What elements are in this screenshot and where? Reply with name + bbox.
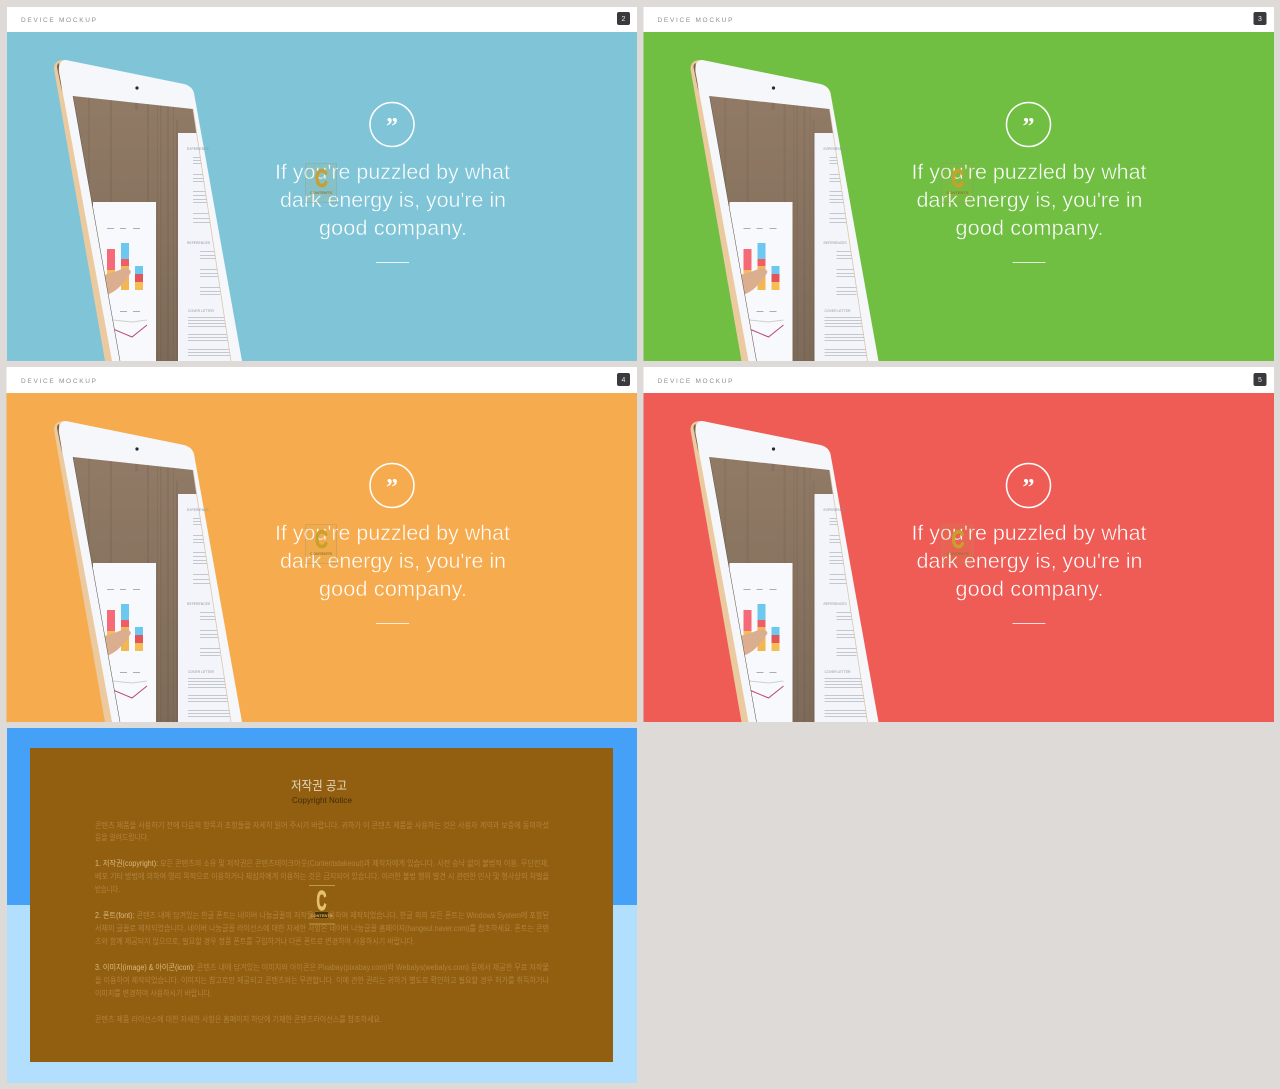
watermark logo: C: [315, 526, 328, 554]
short divider line: [376, 262, 409, 263]
watermark logo: [306, 164, 336, 202]
slide header bar: [7, 7, 637, 32]
watermark logo: [309, 885, 335, 924]
slide header label: DEVICE MOCKUP: [21, 17, 96, 24]
page number badge: [617, 373, 630, 386]
page number badge: 5: [1258, 377, 1262, 384]
tablet photo mockup: EXPERIENCE: [187, 508, 210, 512]
short divider line: [376, 623, 409, 624]
quote text: dark energy is, you're in: [916, 188, 1142, 212]
tablet photo mockup: REFERENCES: [187, 602, 211, 606]
watermark logo: [942, 524, 973, 564]
quote text: good company.: [956, 577, 1104, 601]
quote text: [275, 160, 510, 240]
tablet photo mockup: [690, 60, 886, 365]
slide header label: DEVICE MOCKUP: [21, 378, 96, 385]
notice body text: 이미지를 변경하여 사용하시기 바랍니다.: [95, 988, 212, 998]
notice body text: 서체의 글꼴로 제작되었습니다. 네이버 나눔글꼴 라이선스에 대한 자세한 사항은 네이버 나눔글꼴 홈페이지(hangeul.naver.com)를 참조하세요. 폰트는 콘텐: [95, 923, 549, 933]
slide colour background: [644, 393, 1274, 722]
quote text: If you're puzzled by what: [275, 160, 510, 184]
notice body text: 을 이용하여 제작되었습니다. 이미지는 참고로만 제공되고 콘텐츠와는 무관합니다. 이에 관한 권리는 귀하가 별도로 확인하고 필요할 경우 허가를 취득하거나: [95, 975, 550, 985]
panel: copyright notice slide: [7, 728, 637, 1083]
slide colour background: [7, 32, 637, 361]
panel: device mockup slide 2, blue: [7, 7, 637, 365]
watermark logo: CONTENTS: [946, 190, 969, 195]
tablet photo mockup: [54, 60, 250, 365]
icon: quotation mark in circle: [1006, 464, 1050, 508]
watermark logo: [942, 164, 973, 202]
page number badge: [1254, 373, 1266, 386]
quote text: If you're puzzled by what: [275, 521, 510, 545]
watermark logo: C: [952, 526, 964, 554]
quote text: good company.: [956, 216, 1104, 240]
quote text: dark energy is, you're in: [280, 549, 506, 573]
watermark logo: C: [952, 165, 964, 193]
watermark logo: CONTENTS: [310, 190, 332, 195]
notice body text: 음을 알려드립니다.: [95, 832, 149, 842]
tablet photo mockup: [690, 421, 886, 726]
notice body text: 콘텐츠 제품을 사용하기 전에 다음의 항목과 조항들을 자세히 읽어 주시기 바랍니다. 귀하가 이 콘텐츠 제품을 사용하는 것은 사용자 계약과 보증에 동의하셨: [95, 820, 550, 830]
watermark logo: C: [316, 885, 326, 916]
tablet photo mockup: COVER LETTER: [188, 309, 215, 313]
quote text: If you're puzzled by what: [912, 521, 1147, 545]
tablet photo mockup: EXPERIENCE: [824, 508, 846, 512]
notice body text: 콘텐츠 제품 라이선스에 대한 자세한 사항은 홈페이지 하단에 기재한 콘텐츠라이선스를 참조하세요.: [95, 1014, 382, 1024]
watermark logo: CONTENTS: [946, 551, 969, 556]
notice body text: 3. 이미지(image) & 아이콘(icon): 콘텐츠 내에 담겨있는 이미지와 아이콘은 Pixabay(pixabay.com)와 Webalys(webalys.com) 등에서 제공한 무료 저작물: [95, 962, 549, 972]
page number badge: 3: [1258, 16, 1262, 23]
tablet photo mockup: REFERENCES: [187, 241, 211, 245]
slide header bar: [644, 7, 1274, 32]
slide header bar: [644, 367, 1274, 393]
notice body text: [95, 820, 550, 1024]
quote text: dark energy is, you're in: [280, 188, 506, 212]
notice subtitle: Copyright Notice: [292, 795, 352, 805]
tablet photo mockup: COVER LETTER: [188, 670, 215, 674]
icon: quotation mark in circle: ”: [386, 114, 398, 140]
notice body text: 2. 폰트(font): 콘텐츠 내에 담겨있는 한글 폰트는 네이버 나눔글꼴의 저작물을 이용하여 제작되었습니다. 한글 외의 모든 폰트는 Windows System에 포함된: [95, 910, 549, 920]
watermark logo: [306, 524, 336, 564]
brown notice panel: [30, 748, 613, 1062]
quote text: [912, 521, 1147, 601]
tablet photo mockup: EXPERIENCE: [187, 147, 210, 151]
panel: device mockup slide 3, green: [644, 7, 1274, 365]
quote text: good company.: [319, 216, 467, 240]
icon: quotation mark in circle: [370, 102, 414, 146]
quote text: If you're puzzled by what: [912, 160, 1147, 184]
notice body text: 츠와 함께 제공되지 않으므로, 필요할 경우 정품 폰트를 구입하거나 다른 폰트로 변경하여 사용하시기 바랍니다.: [95, 936, 415, 946]
notice body text: 받습니다.: [95, 884, 120, 894]
tablet photo mockup: COVER LETTER: [824, 670, 851, 674]
panel: device mockup slide 5, red: [644, 367, 1274, 726]
notice body text: 1. 저작권(copyright): 모든 콘텐츠의 소유 및 저작권은 콘텐츠테이크아웃(Contentstakeout)과 제작자에게 있습니다. 사전 승낙 없이 불법적 이용, 무단전재,: [95, 858, 549, 868]
tablet photo mockup: EXPERIENCE: [824, 147, 846, 151]
icon: quotation mark in circle: ”: [386, 475, 398, 501]
icon: quotation mark in circle: [370, 464, 414, 508]
slide colour background: [644, 32, 1274, 361]
slide header bar: [6, 367, 637, 393]
quote text: good company.: [319, 577, 467, 601]
panel: device mockup slide 4, orange: [6, 367, 637, 726]
icon: quotation mark in circle: ”: [1022, 114, 1034, 140]
tablet photo mockup: REFERENCES: [824, 241, 847, 245]
page number badge: 2: [622, 16, 626, 23]
slide header label: DEVICE MOCKUP: [658, 17, 732, 24]
notice title: 저작권 공고: [291, 779, 347, 793]
notice body text: 배포 기타 방법에 의하여 영리 목적으로 이용하거나 제삼자에게 이용하는 것은 금지되어 있습니다. 이러한 불법 행위 발견 시 관련한 민사 및 형사상의 처벌을: [95, 871, 549, 881]
short divider line: [1012, 262, 1046, 263]
quote text: [275, 521, 510, 601]
icon: quotation mark in circle: [1006, 102, 1050, 146]
quote text: [912, 160, 1147, 240]
slide colour background: [6, 393, 637, 722]
page number badge: [1254, 12, 1266, 25]
page number badge: 4: [622, 377, 626, 384]
short divider line: [1012, 623, 1046, 624]
watermark logo: C: [315, 165, 328, 193]
slide background, lower light blue: [7, 905, 637, 1083]
quote text: dark energy is, you're in: [916, 549, 1142, 573]
slide background, upper blue: [7, 728, 637, 905]
watermark logo: CONTENTS: [310, 551, 332, 556]
tablet photo mockup: REFERENCES: [824, 602, 847, 606]
watermark logo: CONTENTS: [310, 913, 333, 918]
page number badge: [617, 12, 630, 25]
slide header label: DEVICE MOCKUP: [658, 378, 732, 385]
tablet photo mockup: COVER LETTER: [824, 309, 851, 313]
tablet photo mockup: [54, 421, 250, 726]
icon: quotation mark in circle: ”: [1022, 475, 1034, 501]
